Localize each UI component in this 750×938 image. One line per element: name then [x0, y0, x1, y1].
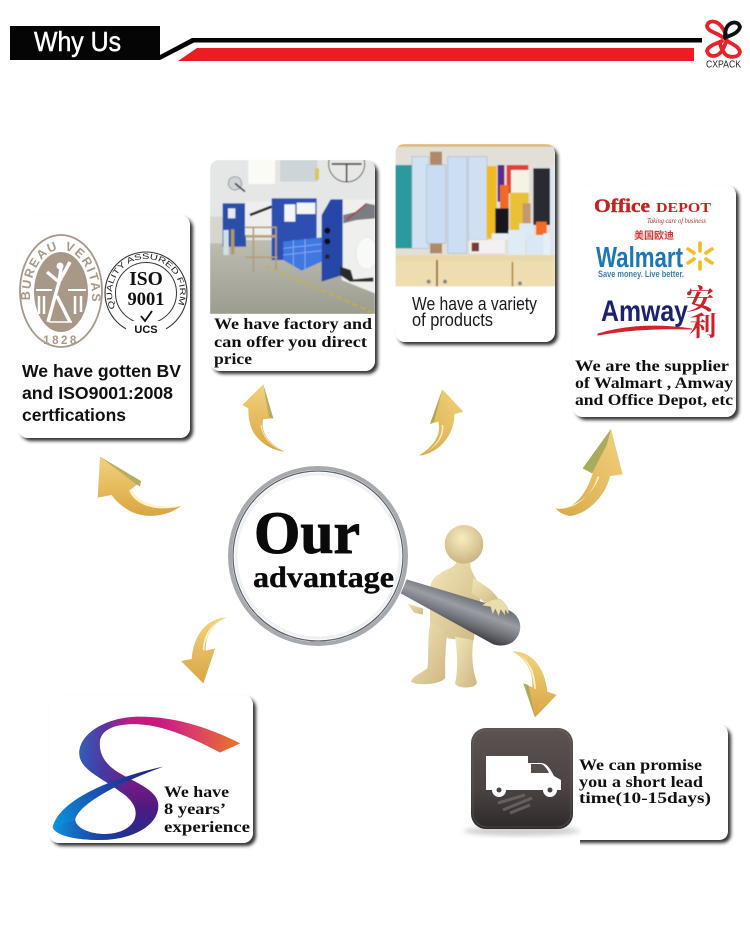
- caption: [579, 757, 711, 807]
- logo: Amway: 利: [690, 305, 716, 344]
- logo: Amway: 安: [686, 278, 716, 318]
- caption: and Office Depot, etc: [575, 392, 733, 409]
- icon: ISO 9001 stamp: 9001: [128, 290, 164, 310]
- arrow: to lead time: [512, 652, 557, 717]
- caption: We are the supplier: [575, 358, 729, 375]
- caption: experience: [164, 819, 250, 836]
- arrow: to experience: [181, 617, 227, 683]
- logo mark: [707, 22, 740, 57]
- caption: We have factory and: [214, 316, 372, 333]
- caption: of Walmart , Amway: [575, 375, 733, 392]
- arrow: to factory: [242, 384, 284, 452]
- logo: Office Depot: Office: [594, 196, 650, 217]
- caption: time(10-15days): [579, 790, 711, 807]
- logo: Office Depot: 美国欧迪: [634, 229, 674, 242]
- caption: [575, 358, 733, 409]
- panel: factory: [210, 146, 377, 371]
- panel: certifications: [18, 216, 196, 444]
- caption: We have a variety: [412, 293, 538, 314]
- card background: [573, 185, 736, 417]
- icon: Bureau Veritas seal: 1828: [43, 335, 79, 347]
- caption: [412, 293, 538, 330]
- figure body: [407, 562, 499, 688]
- figure head: [445, 525, 483, 564]
- truck: [486, 756, 561, 790]
- logo: Amway: [598, 278, 716, 344]
- header: Why Us banner: [10, 26, 702, 61]
- card background: [462, 725, 728, 840]
- icon: reflection: [464, 826, 580, 836]
- caption: [214, 316, 372, 368]
- arrow: to certifications: [98, 457, 181, 516]
- caption: We have: [164, 784, 229, 801]
- icon: ISO 9001 stamp: [104, 252, 188, 336]
- panel: lead time: [458, 725, 728, 847]
- black header line: [160, 38, 702, 60]
- caption: price: [214, 351, 252, 368]
- caption: can offer you direct: [214, 334, 368, 351]
- magnifier lens: [228, 466, 408, 646]
- card background: [210, 160, 375, 371]
- icon: ISO 9001 stamp: ISO: [129, 269, 163, 290]
- card background: [395, 144, 555, 342]
- caption: and ISO9001:2008: [22, 383, 173, 403]
- card background: [18, 215, 190, 438]
- figure hand: [483, 599, 509, 616]
- arrow: to products: [419, 389, 463, 456]
- panel: products: [395, 144, 555, 342]
- title: Why Us: [34, 26, 121, 57]
- icon: Bureau Veritas seal: BUREAU VERITAS: [21, 242, 101, 302]
- caption: you a short lead: [579, 774, 703, 791]
- caption: 8 years’: [164, 801, 226, 818]
- logo wordmark: CXPACK: [706, 60, 741, 70]
- logo: Amway: Amway: [601, 295, 688, 328]
- caption: We can promise: [579, 757, 702, 774]
- logo: Office Depot: DEPOT: [656, 200, 711, 215]
- icon: ISO 9001 stamp: QUALITY ASSURED FIRM: [106, 253, 186, 309]
- panel: supplier logos: [573, 185, 736, 417]
- icon: truck tile: [471, 728, 573, 829]
- magnifier handle: [401, 579, 520, 646]
- logo: Office Depot: [594, 196, 711, 242]
- heading: Our: Our: [254, 500, 360, 566]
- factory photo: [210, 146, 377, 314]
- caption: of products: [412, 309, 493, 330]
- panel: experience: [49, 695, 253, 843]
- card background: [49, 695, 253, 843]
- logo: Office Depot: Taking care of business: [647, 216, 706, 225]
- logo: Walmart: Walmart: [596, 242, 683, 274]
- red header bar: [178, 48, 694, 61]
- logo: CXPACK: [706, 22, 741, 70]
- caption: We have gotten BV: [22, 361, 181, 381]
- icon: ISO 9001 stamp: UCS: [134, 324, 158, 336]
- caption: [164, 784, 250, 836]
- center: magnifier and figure: [401, 525, 520, 688]
- logo: Walmart: Save money. Live better.: [598, 269, 684, 279]
- heading: advantage: advantage: [253, 561, 394, 594]
- caption: certfications: [22, 405, 126, 425]
- caption: [22, 361, 181, 425]
- title tab: [10, 26, 160, 60]
- arrow: to supplier logos: [556, 429, 623, 516]
- products photo: [395, 144, 555, 287]
- cover left shadow: [458, 835, 580, 847]
- icon: figure 8 swoosh: [53, 717, 240, 840]
- icon: Bureau Veritas seal: [19, 234, 103, 348]
